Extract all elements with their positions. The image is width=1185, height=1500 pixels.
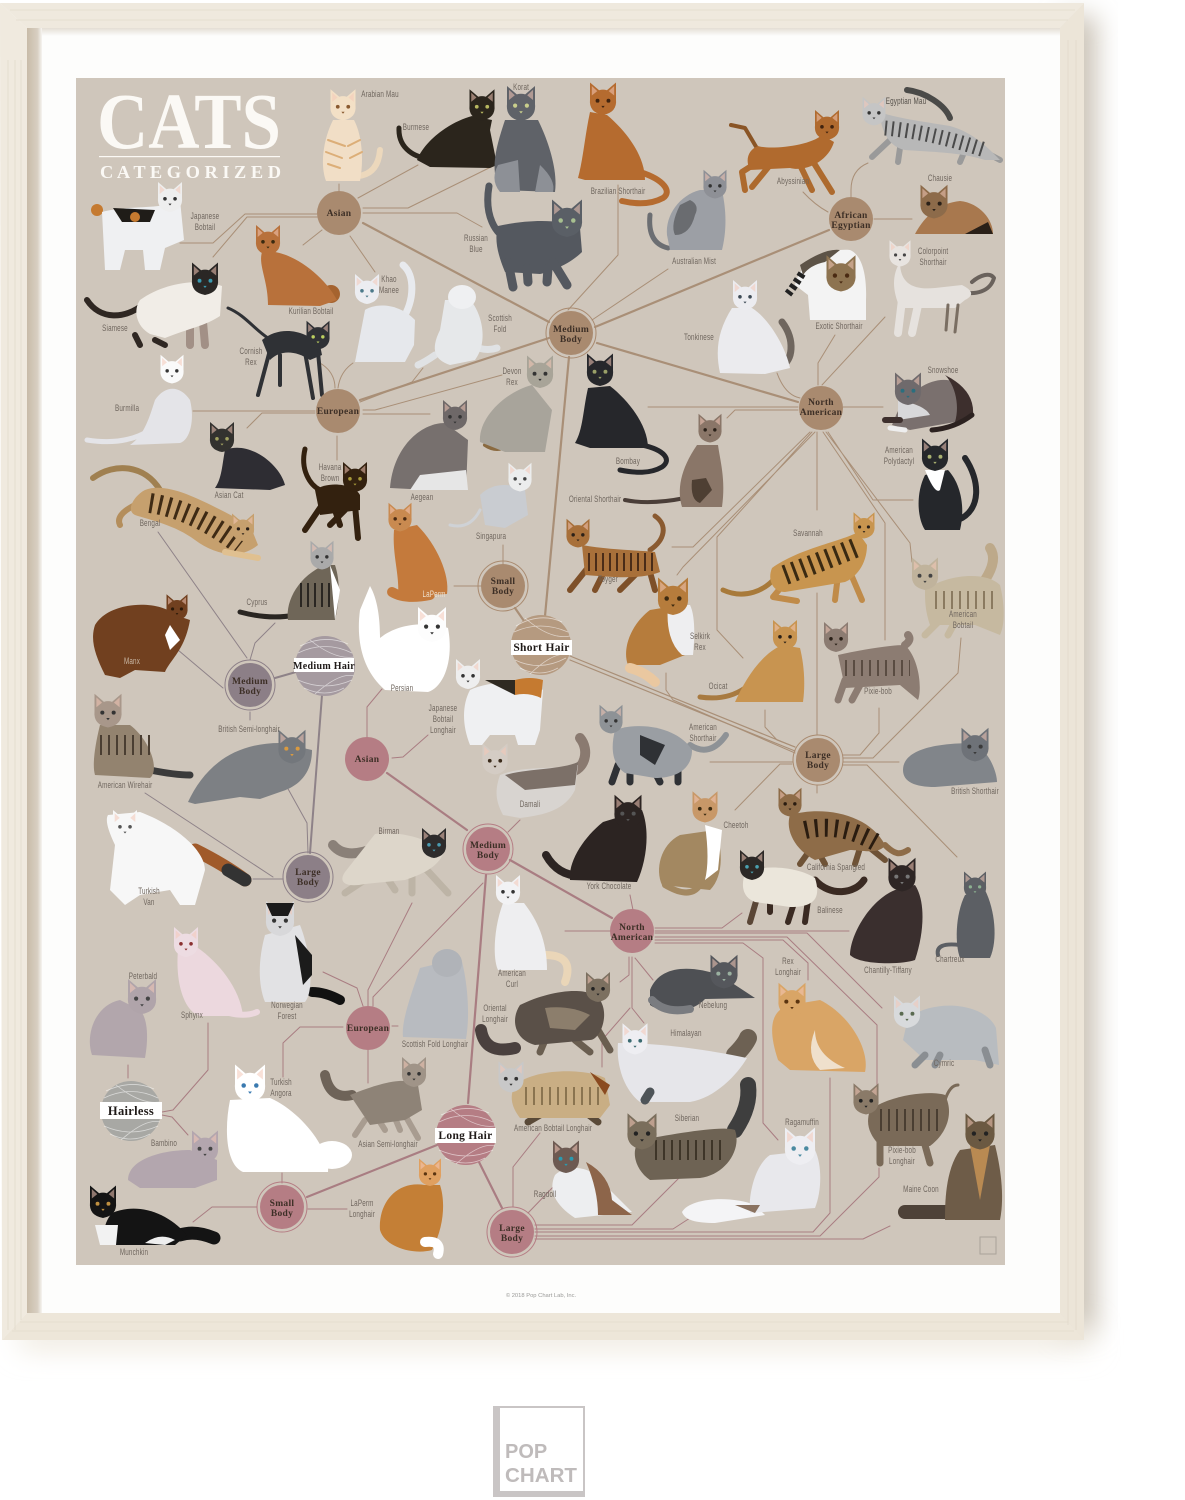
breed labels: Chausie — [928, 173, 952, 183]
cat: Bombay — [575, 354, 666, 472]
breed labels: Bobtail — [433, 714, 453, 724]
yarn: Long Hair — [435, 1105, 496, 1165]
node: European (short hair) — [316, 389, 360, 433]
cat: Brazilian Shorthair — [578, 82, 667, 203]
breed labels: Rex — [506, 377, 518, 387]
cat: LaPerm — [388, 503, 447, 597]
cat: American Wirehair — [94, 694, 190, 778]
breed labels: Ragamuffin — [785, 1117, 819, 1127]
breed labels: Japanese — [429, 703, 457, 713]
cat: Ragamuffin — [682, 1128, 820, 1223]
node: Large Body (long hair) — [487, 1207, 537, 1257]
breed labels: Khao — [381, 274, 397, 284]
breed labels: Munchkin — [120, 1247, 148, 1257]
breed labels: Polydactyl — [884, 456, 914, 466]
cat: Snowshoe — [885, 372, 973, 430]
node: North American (short hair): American — [800, 408, 843, 418]
cat: Munchkin — [90, 1186, 214, 1245]
node: Small Body (long hair) — [257, 1182, 307, 1232]
cat: Persian — [359, 586, 450, 692]
cat: Asian Cat — [210, 422, 285, 490]
breed labels: Scottish Fold Longhair — [402, 1039, 468, 1049]
cat: Cornish Rex — [228, 308, 330, 398]
cat: Havana Brown — [304, 449, 367, 538]
cat: Arabian Mau — [323, 89, 380, 181]
cat: Himalayan — [618, 1023, 748, 1102]
node: Small Body (short hair) — [478, 561, 528, 611]
node: African Egyptian — [829, 197, 873, 241]
node: Large Body (long hair): Body — [501, 1234, 523, 1244]
breed labels: Brazilian Shorthair — [591, 186, 646, 196]
breed labels: Burmilla — [115, 403, 140, 413]
poster panel — [76, 78, 1005, 1265]
breed labels: Tonkinese — [684, 332, 714, 342]
breed labels: Russian — [464, 233, 488, 243]
breed labels: Longhair — [775, 967, 801, 977]
cat: Maine Coon — [905, 1113, 1002, 1220]
breed labels: Peterbald — [129, 971, 157, 981]
node: Medium Body (medium hair): Body — [239, 687, 261, 697]
breed labels: Fold — [494, 324, 506, 334]
cat: York Chocolate — [546, 795, 647, 882]
breed labels: British Semi-longhair — [218, 724, 280, 734]
yarn: Medium Hair — [293, 636, 355, 696]
breed labels: Angora — [270, 1088, 292, 1098]
breed labels: Siamese — [102, 323, 128, 333]
breed labels: Birman — [379, 826, 399, 836]
cat: Scottish Fold Longhair — [403, 949, 468, 1039]
breed labels: Pixie-bob — [864, 686, 892, 696]
breed labels: Siberian — [675, 1113, 699, 1123]
node: North American (long hair): North — [619, 923, 645, 933]
node: Small Body (long hair): Body — [271, 1209, 293, 1219]
breed labels: Bobtail — [953, 620, 973, 630]
breed labels: American — [949, 609, 977, 619]
cat: Oriental Shorthair — [625, 414, 723, 507]
breed labels: Arabian Mau — [361, 89, 399, 99]
cat: Siberian — [627, 1085, 748, 1180]
node: Large Body (long hair): Large — [499, 1224, 525, 1234]
cat: British Semi-longhair — [188, 730, 312, 804]
cat: Devon Rex — [480, 356, 553, 452]
cat: Japanese Bobtail — [91, 182, 184, 270]
cat: Pixie-bob Longhair — [853, 1083, 958, 1163]
breed labels: Brown — [321, 473, 339, 483]
breed labels: LaPerm — [351, 1198, 374, 1208]
cat: Bambino — [128, 1130, 218, 1188]
breed labels: Pixie-bob — [888, 1145, 916, 1155]
breed labels: Asian Semi-longhair — [358, 1139, 418, 1149]
cat: Sphynx — [174, 927, 257, 1016]
cat: Chausie — [915, 185, 993, 234]
node: Large Body (short hair): Large — [805, 751, 831, 761]
breed labels: Maine Coon — [903, 1184, 939, 1194]
cat: Colorpoint Shorthair — [889, 240, 994, 333]
breed labels: Manx — [124, 656, 140, 666]
breed labels: Shorthair — [920, 257, 947, 267]
breed labels: Japanese — [191, 211, 219, 221]
breed labels: Longhair — [889, 1156, 915, 1166]
breed labels: York Chocolate — [587, 881, 631, 891]
cat: Rex Longhair — [772, 983, 866, 1072]
breed labels: Himalayan — [670, 1028, 702, 1038]
breed labels: American Bobtail Longhair — [514, 1123, 592, 1133]
breed labels: Blue — [469, 244, 483, 254]
cat: Asian Semi-longhair — [325, 1057, 426, 1138]
breed labels: Australian Mist — [672, 256, 717, 266]
breed labels: California Spangled — [807, 862, 865, 872]
cat: Turkish Angora — [227, 1064, 352, 1172]
breed labels: Curl — [506, 979, 518, 989]
cat: Egyptian Mau — [862, 90, 1000, 162]
breed labels — [98, 82, 999, 1257]
breed labels: Colorpoint — [918, 246, 948, 256]
cat: Burmilla — [87, 355, 192, 445]
breed labels: Persian — [391, 683, 413, 693]
cat: Scottish Fold — [418, 285, 497, 365]
node: Asian (long hair): Asian — [355, 755, 380, 765]
breed labels: Singapura — [476, 531, 507, 541]
title: CATS — [97, 79, 281, 166]
yarn: Medium Hair: Medium Hair — [293, 661, 355, 672]
breed labels: Van — [143, 897, 155, 907]
poster maker mark — [980, 1237, 996, 1254]
cat: American Curl — [495, 875, 568, 982]
breed labels: Turkish — [270, 1077, 292, 1087]
cat: American Bobtail Longhair — [498, 1061, 610, 1122]
cat: Cyprus — [240, 541, 340, 620]
breed labels: British Shorthair — [951, 786, 999, 796]
breed labels: Bambino — [151, 1138, 177, 1148]
node: North American (short hair): North — [808, 398, 834, 408]
connector lines: short hair tree — [180, 163, 961, 857]
node: European (long hair): European — [347, 1024, 390, 1034]
node: Medium Body (long hair): Medium — [470, 841, 506, 851]
breed labels: Longhair — [430, 725, 456, 735]
breed labels: Egyptian Mau — [886, 96, 926, 106]
cat: California Spangled — [778, 788, 908, 864]
breed labels: Havana — [319, 462, 341, 472]
cat: LaPerm Longhair — [380, 1158, 443, 1254]
node: North American (short hair) — [799, 386, 843, 430]
cat: Russian Blue — [488, 186, 582, 287]
breed labels: Kurilian Bobtail — [289, 306, 333, 316]
cat: British Shorthair — [903, 728, 997, 787]
node: Medium Body (short hair) — [546, 308, 596, 358]
node: Medium Body (medium hair): Medium — [232, 677, 268, 687]
breed labels: Rex — [694, 642, 706, 652]
yarn: Short Hair — [511, 615, 572, 675]
breed labels: American — [885, 445, 913, 455]
breed labels: Bombay — [616, 456, 640, 466]
node: Large Body (short hair): Body — [807, 761, 829, 771]
cat: Cymric — [894, 996, 999, 1065]
cat: Australian Mist — [650, 170, 727, 250]
node: Medium Body (long hair): Body — [477, 851, 499, 861]
cat: Ocicat — [700, 620, 804, 702]
breed labels: Turkish — [138, 886, 160, 896]
node: Medium Body (short hair): Body — [560, 335, 582, 345]
yarn: Hairless — [100, 1081, 162, 1141]
logo: Pop Chart: CHART — [505, 1465, 577, 1487]
node: Small Body (short hair): Small — [491, 577, 515, 587]
breed labels: Nebelung — [699, 1000, 727, 1010]
cat: Tonkinese — [718, 280, 791, 374]
breed labels: Cornish — [240, 346, 262, 356]
connector lines: long hair tree — [128, 689, 890, 1239]
breed labels: Aegean — [411, 492, 433, 502]
cat: Norwegian Forest — [260, 901, 340, 1002]
breed labels: Abyssinian — [777, 176, 809, 186]
cat: Selkirk Rex — [626, 578, 694, 682]
node: Small Body (short hair): Body — [492, 587, 514, 597]
breed labels: Devon — [502, 366, 522, 376]
breed labels: Cyprus — [247, 597, 267, 607]
title: C A T E G O R I Z E D — [100, 162, 281, 182]
cat: Exotic Shorthair — [788, 250, 866, 320]
yarn: Long Hair: Long Hair — [438, 1130, 493, 1142]
breed labels: Burmese — [403, 122, 429, 132]
node: African Egyptian: African — [834, 211, 868, 221]
node: Large Body (medium hair): Large — [295, 868, 321, 878]
breed labels: American — [689, 722, 717, 732]
breed labels: Longhair — [482, 1014, 508, 1024]
node: Asian (long hair) — [345, 737, 389, 781]
cat: Aegean — [390, 400, 468, 490]
breed labels: Bobtail — [195, 222, 215, 232]
breed labels: Selkirk — [690, 631, 710, 641]
breed labels: Exotic Shorthair — [815, 321, 863, 331]
breed labels: Korat — [513, 82, 530, 92]
breed labels: Chartreux — [935, 954, 965, 964]
breed labels: Scottish — [488, 313, 512, 323]
cat: Ragdoll — [552, 1140, 632, 1218]
yarn: Hairless: Hairless — [108, 1104, 154, 1118]
breed labels: Rex — [782, 956, 794, 966]
breed labels: American — [498, 968, 526, 978]
cat: Nebelung — [650, 955, 755, 1011]
cat: Siamese — [87, 262, 222, 345]
breed labels: Snowshoe — [928, 365, 958, 375]
yarn: Short Hair: Short Hair — [513, 642, 570, 654]
node: North American (long hair) — [610, 909, 654, 953]
breed labels: Shorthair — [689, 733, 717, 743]
breed labels: LaPerm — [422, 589, 446, 599]
breed labels: Cheetoh — [724, 820, 748, 830]
cat: Pixie-bob — [824, 622, 920, 700]
cat: Korat — [494, 86, 556, 192]
breed labels: Manee — [379, 285, 399, 295]
node: Small Body (long hair): Small — [270, 1199, 294, 1209]
cat: Khao Manee — [355, 265, 415, 362]
breed labels: Savannah — [793, 528, 823, 538]
cat: Abyssinian — [731, 110, 839, 192]
cat: Bengal — [93, 468, 258, 558]
cat: Japanese Bobtail Longhair — [456, 659, 543, 745]
breed labels: Asian Cat — [215, 490, 244, 500]
cat: Cheetoh — [659, 791, 722, 892]
cat: Chantilly-Tiffany — [850, 858, 922, 963]
node: Medium Body (medium hair) — [225, 660, 275, 710]
cat: Turkish Van — [107, 810, 245, 905]
breed labels: Bengal — [140, 518, 160, 528]
breed labels: Norwegian — [271, 1000, 303, 1010]
copyright: © 2018 Pop Chart Lab, Inc. — [506, 1292, 577, 1299]
cat: American Shorthair — [599, 705, 726, 782]
cat: American Polydactyl — [919, 438, 976, 530]
logo: Pop Chart — [493, 1406, 585, 1497]
connector lines: medium hair tree — [145, 532, 322, 879]
breed labels: Toyger — [598, 574, 618, 584]
breed labels: Damali — [520, 799, 540, 809]
node: African Egyptian: Egyptian — [831, 221, 871, 231]
breed labels: Cymric — [934, 1058, 954, 1068]
breed labels: Longhair — [349, 1209, 375, 1219]
cat: Manx — [93, 594, 190, 678]
breed labels: American Wirehair — [98, 780, 153, 790]
cat: Burmese — [399, 89, 497, 168]
breed labels: Ragdoll — [534, 1189, 556, 1199]
cat: Balinese — [740, 850, 864, 922]
node: Asian (short hair) — [317, 191, 361, 235]
breed labels: Chantilly-Tiffany — [864, 965, 912, 975]
node: European (short hair): European — [317, 407, 360, 417]
cat: Savannah — [723, 512, 875, 601]
breed labels: Balinese — [817, 905, 843, 915]
cat: Kurilian Bobtail — [256, 225, 340, 306]
breed labels: Forest — [278, 1011, 297, 1021]
cat: Chartreux — [938, 872, 995, 958]
node: Asian (short hair): Asian — [327, 209, 352, 219]
cat: Damali — [482, 738, 585, 818]
node: North American (long hair): American — [611, 933, 654, 943]
cat: American Bobtail — [912, 548, 1004, 635]
node: European (long hair) — [346, 1006, 390, 1050]
cat: Birman — [333, 828, 448, 893]
breed labels: Ocicat — [709, 681, 728, 691]
breed labels: Sphynx — [181, 1010, 203, 1020]
node: Large Body (medium hair) — [283, 852, 333, 902]
breed labels: Oriental — [483, 1003, 507, 1013]
logo: Pop Chart: POP — [505, 1441, 547, 1463]
cat: Toyger — [566, 516, 663, 590]
node: Medium Body (long hair) — [463, 824, 513, 874]
breed labels: Rex — [245, 357, 257, 367]
node: Large Body (medium hair): Body — [297, 878, 319, 888]
cat: Oriental Longhair — [481, 972, 610, 1052]
node: Medium Body (short hair): Medium — [553, 325, 589, 335]
breed labels: Oriental Shorthair — [569, 494, 621, 504]
cat: Peterbald — [90, 979, 156, 1058]
cat: Singapura — [450, 463, 532, 528]
node: Large Body (short hair) — [793, 735, 843, 785]
